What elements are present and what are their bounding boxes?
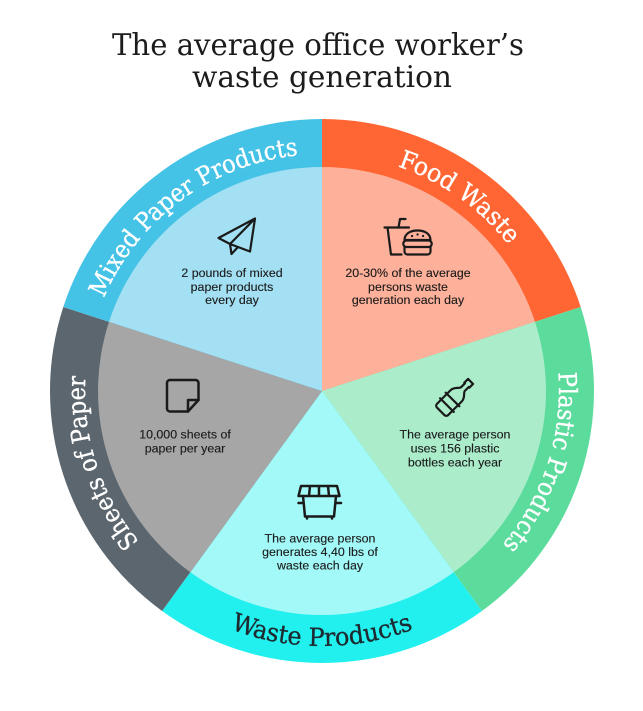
text: mixed paper: paper products [191, 280, 273, 294]
label: waste products: Waste Products [236, 612, 412, 646]
segment: plastic products [322, 307, 594, 611]
label: food waste: Food Waste [398, 149, 516, 242]
icon: soda and burger [384, 219, 432, 254]
icon: sticky note [167, 380, 198, 412]
text: plastic products: uses 156 plastic [411, 442, 499, 456]
title: waste generation [192, 60, 452, 95]
segment: mixed paper products [63, 119, 322, 391]
label: plastic products: Plastic Products [504, 372, 578, 552]
text: sheets of paper: paper per year [145, 442, 225, 456]
title [112, 28, 524, 95]
text: food waste: generation each day [352, 293, 465, 307]
icon: paper plane [218, 218, 255, 254]
text: mixed paper: 2 pounds of mixed [181, 266, 283, 280]
label: sheets of paper: Sheets of Paper [70, 376, 138, 550]
text: waste products: The average person [265, 532, 375, 546]
segment: sheets of paper [50, 307, 322, 611]
text: sheets of paper: 10,000 sheets of [139, 428, 231, 442]
text: waste products: waste each day [276, 558, 364, 572]
text: food waste: 20-30% of the average [345, 266, 471, 280]
segment: waste products [162, 391, 482, 663]
icon: dumpster [298, 486, 341, 518]
text: mixed paper: every day [205, 293, 260, 307]
text: food waste: persons waste [368, 280, 448, 294]
icon: bottle [434, 375, 477, 418]
segment: food waste [322, 119, 581, 391]
text: plastic products: bottles each year [408, 456, 502, 470]
title: The average office worker’s [112, 28, 524, 63]
text: waste products: generates 4,40 lbs of [262, 545, 378, 559]
label: mixed paper products: Mixed Paper Products [88, 140, 297, 298]
text: plastic products: The average person [400, 428, 510, 442]
